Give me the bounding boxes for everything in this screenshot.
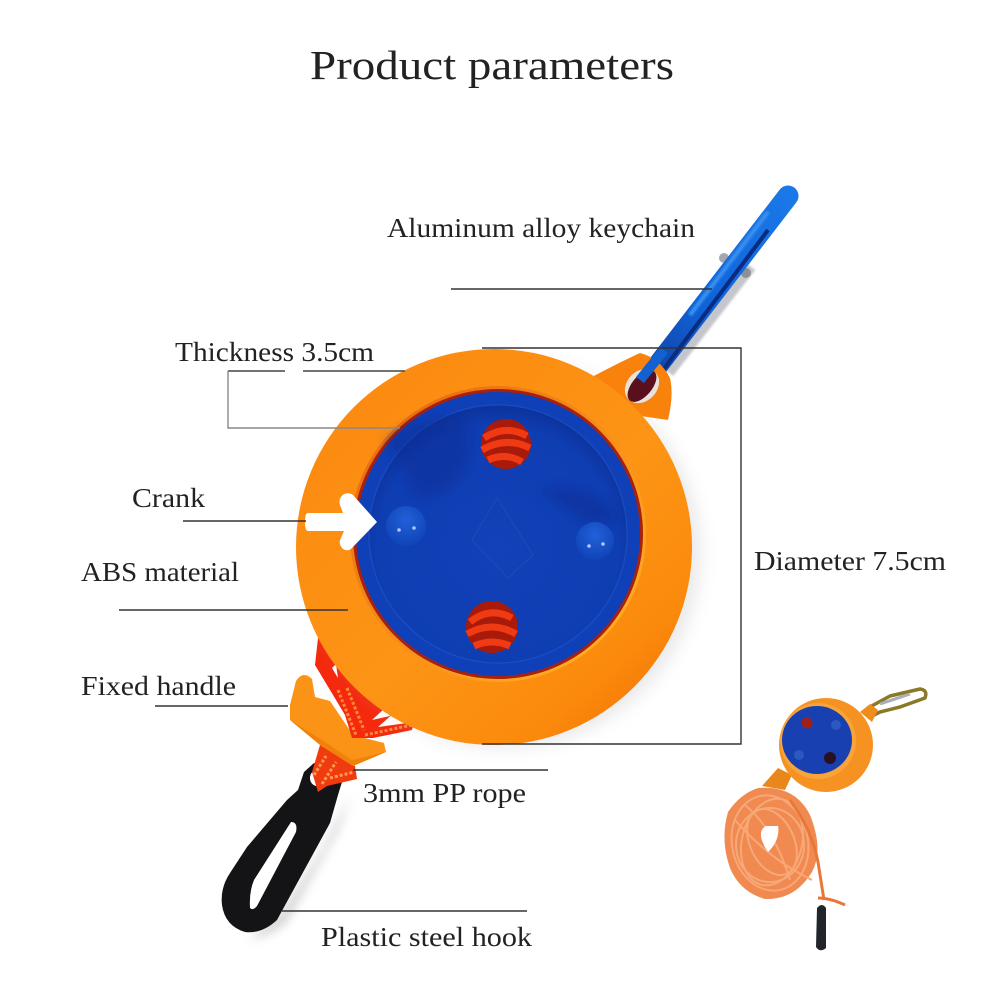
leader lines [119,289,741,911]
label: thickness: Thickness 3.5cm [175,337,374,367]
knob right [576,522,614,560]
label: hook: Plastic steel hook [321,922,533,952]
label: rope: 3mm PP rope [363,778,526,808]
small hook [816,905,826,950]
title: Product parameters [310,42,674,88]
blue spool disc [356,392,640,676]
label: crank: Crank [132,483,206,513]
icon: reel body [296,349,701,748]
label: fixed handle: Fixed handle [81,671,236,701]
knob left [386,506,426,546]
small carabiner [868,689,926,716]
label: diameter: Diameter 7.5cm [754,546,946,576]
small reel [779,698,878,792]
label: ABS material: ABS material [81,557,239,587]
icon: plastic steel hook [222,763,350,938]
label: aluminum alloy keychain: Aluminum alloy keychain [387,213,696,243]
icon: fixed handle [290,675,386,766]
rope coil [723,788,845,905]
rope hole top [481,419,531,469]
icon: rope knot [312,745,357,792]
icon: aluminum carabiner keychain [645,196,788,382]
rope hole bottom [466,601,518,653]
keychain tab [590,350,672,420]
icon: white arrow [305,493,377,550]
small product photo [723,689,926,950]
small connector [762,768,792,790]
icon: red rope [315,638,414,738]
